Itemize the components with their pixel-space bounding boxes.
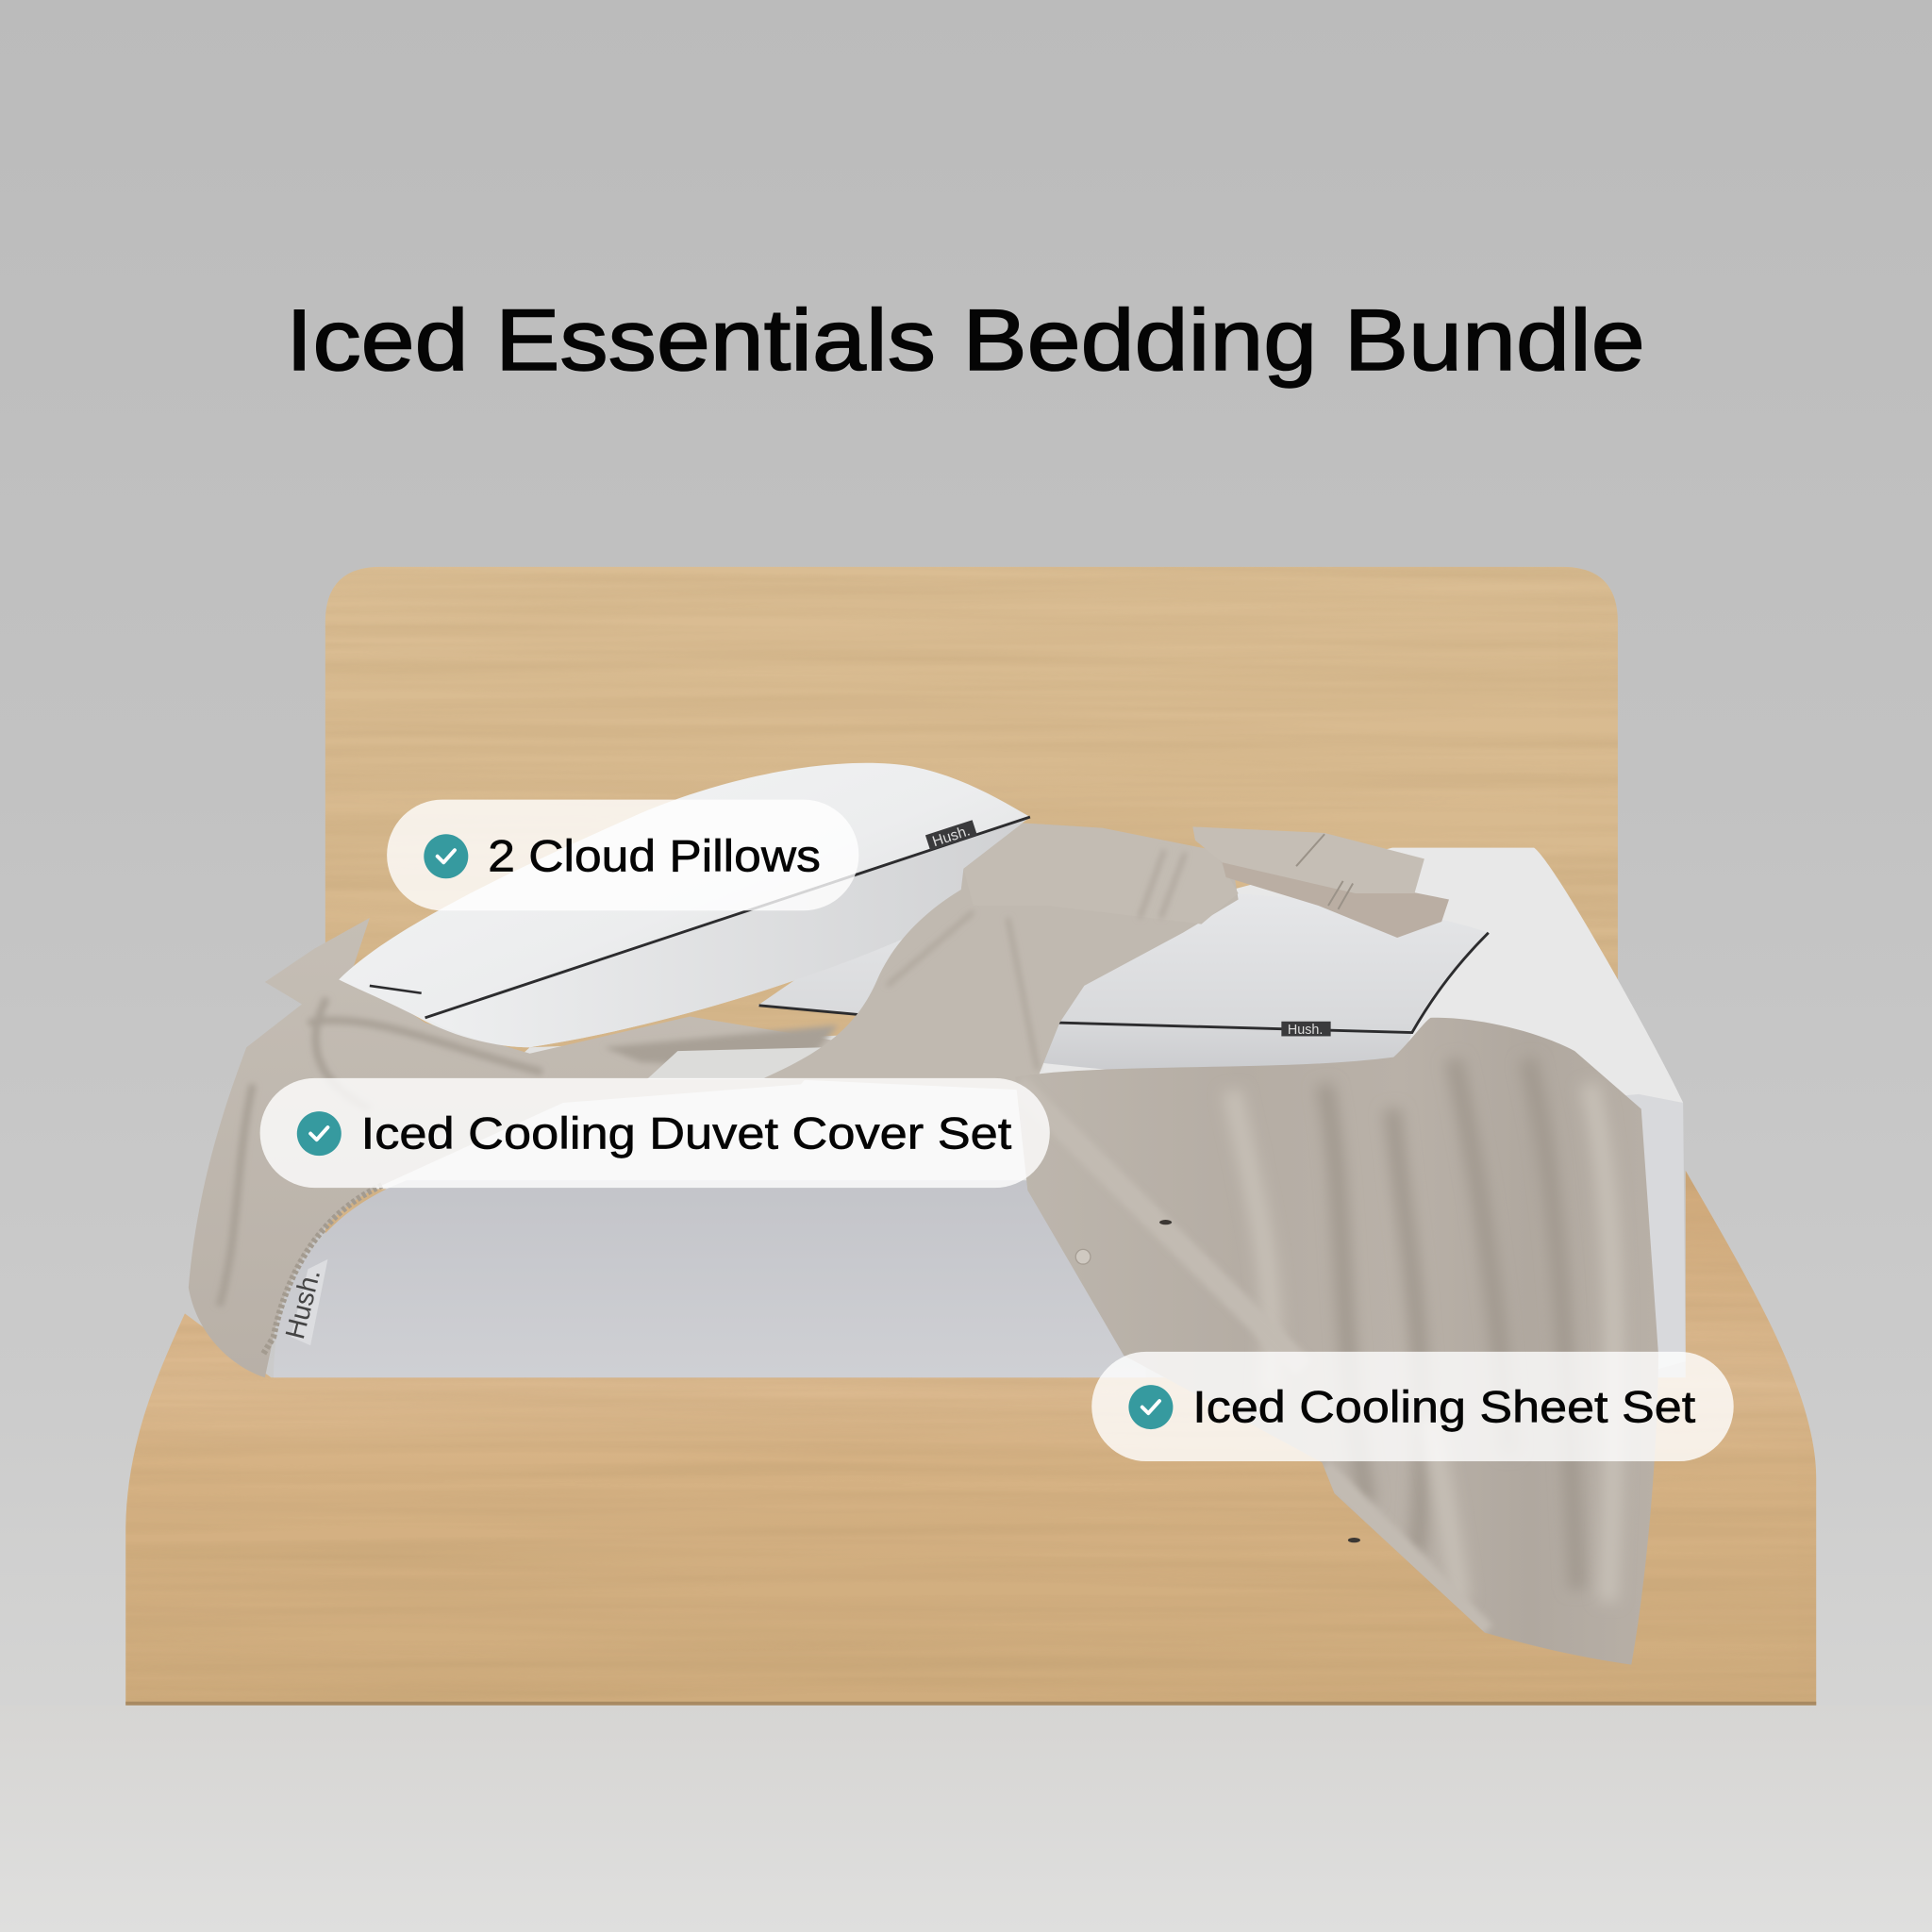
- label pill: Iced Cooling Sheet Set: [1091, 1352, 1734, 1461]
- label text: Iced Cooling Duvet Cover Set: [361, 1108, 1011, 1158]
- icon: check: [1128, 1385, 1173, 1429]
- mattress front: [274, 1180, 1146, 1377]
- drape folds: [1018, 1059, 1614, 1633]
- pillow tag: Hush.: [1288, 1023, 1323, 1038]
- pillow: front left: [339, 763, 1030, 1047]
- placket: [1066, 1129, 1491, 1632]
- mattress label: Hush: Hush.: [280, 1266, 326, 1342]
- headboard: [325, 566, 1618, 1234]
- sheet: left fitted sheet: [189, 918, 838, 1377]
- mattress: [274, 848, 1686, 1377]
- icon: check: [297, 1111, 341, 1156]
- label text: 2 Cloud Pillows: [488, 830, 821, 880]
- buttons: [1075, 1249, 1091, 1264]
- sheet: centre duvet fold: [764, 823, 1239, 1091]
- mattress top: [986, 848, 1683, 1115]
- icon: check: [424, 834, 468, 878]
- visible mattress patch: [647, 1047, 825, 1079]
- elastic edge: [262, 1185, 382, 1356]
- floor: [0, 1706, 1932, 1932]
- pillow: back right: [758, 893, 1489, 1078]
- mattress middle top: [370, 1035, 1047, 1189]
- label text: Iced Cooling Sheet Set: [1192, 1381, 1695, 1431]
- label pill: 2 Cloud Pillows: [387, 800, 858, 910]
- title: Iced Essentials Bedding Bundle: [286, 292, 1645, 389]
- pillow tag: [1281, 1022, 1331, 1038]
- pillow tag: [925, 820, 977, 852]
- piping: [759, 933, 1489, 1033]
- sheet: right drape: [1015, 1018, 1658, 1665]
- mattress right side: [1478, 1094, 1686, 1377]
- label pill: Iced Cooling Duvet Cover Set: [260, 1078, 1050, 1188]
- bed base: [124, 1171, 1819, 1707]
- pillow lower face: [425, 817, 1030, 1047]
- folded pillowcases: [1192, 826, 1449, 938]
- pillow tag: Hush.: [930, 823, 972, 850]
